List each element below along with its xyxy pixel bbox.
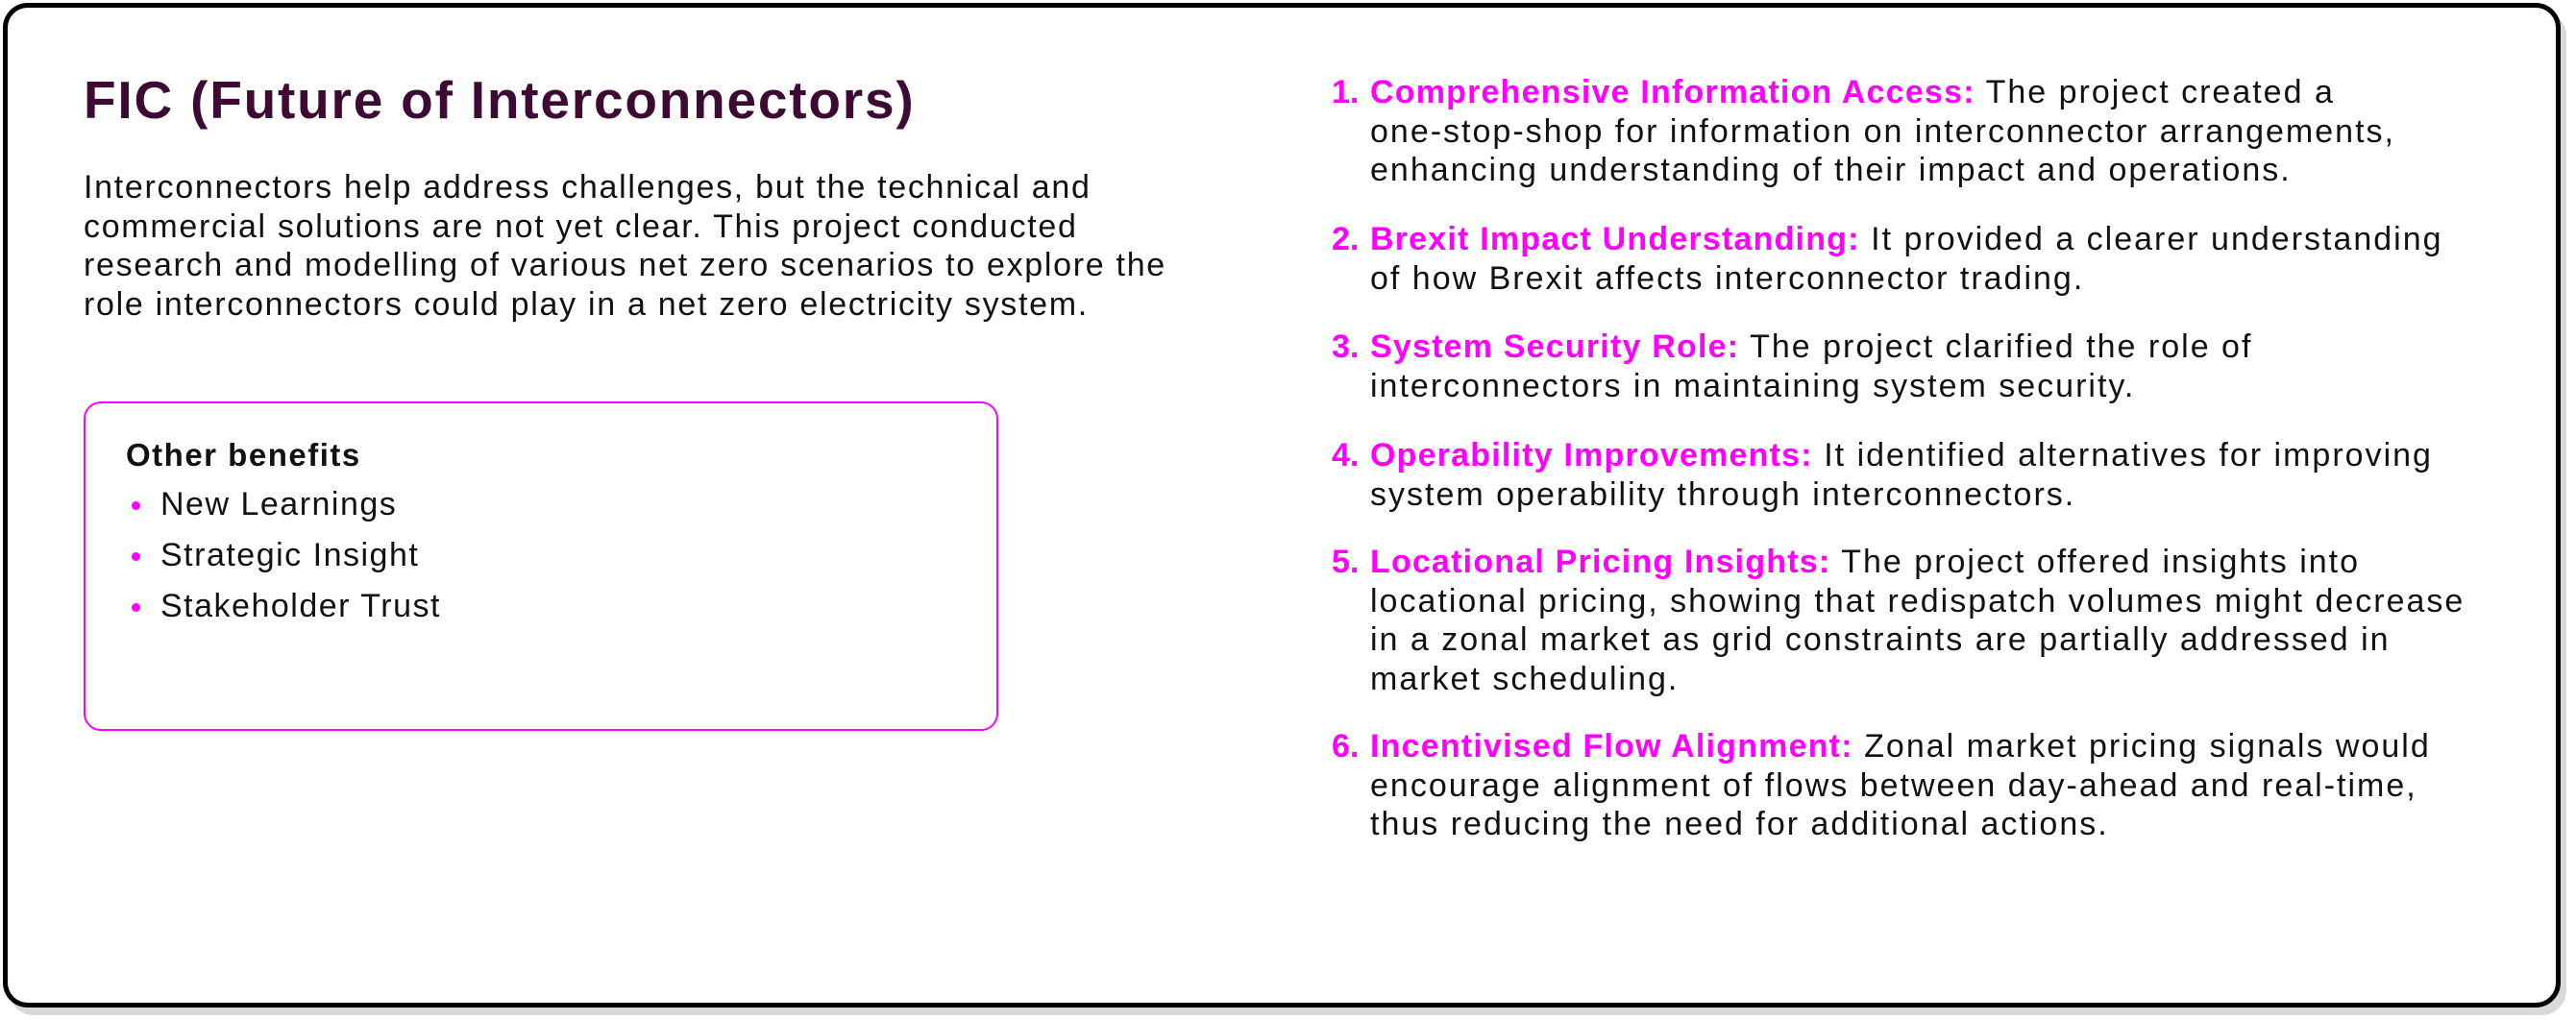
list item 2: of how Brexit affects interconnector trading.	[1370, 260, 2084, 297]
list item 1: 1.	[1332, 74, 1359, 110]
list item 6: 6.	[1332, 728, 1359, 765]
bullet: new learnings: New Learnings	[160, 486, 397, 522]
list item 5: in a zonal market as grid constraints are partially addressed in	[1370, 621, 2391, 658]
panel: other benefits	[84, 401, 998, 731]
list item 1	[1332, 74, 2395, 188]
list item 4: 4.	[1332, 437, 1359, 474]
list item 4: system operability through interconnectors.	[1370, 476, 2075, 513]
text block: intro: role interconnectors could play in a net zero electricity system.	[84, 286, 1089, 323]
list item 2	[1332, 221, 2443, 297]
list item 1: Comprehensive Information Access: The project created a	[1370, 74, 2335, 110]
list item 6: thus reducing the need for additional actions.	[1370, 806, 2109, 842]
heading: other benefits: Other benefits	[126, 437, 361, 473]
list item 3: 3.	[1332, 328, 1359, 365]
text block: intro: Interconnectors help address challenges, but the technical and	[84, 169, 1092, 206]
list item 5: market scheduling.	[1370, 661, 1679, 697]
list item 1: one-stop-shop for information on interconnector arrangements,	[1370, 113, 2395, 150]
text block: intro: research and modelling of various net zero scenarios to explore the	[84, 247, 1166, 283]
list item 6	[1332, 728, 2431, 842]
list item 3: System Security Role: The project clarified the role of	[1370, 328, 2252, 365]
list item 5: 5.	[1332, 544, 1359, 580]
list item 6: Incentivised Flow Alignment: Zonal market pricing signals would	[1370, 728, 2431, 765]
list item 5: locational pricing, showing that redispatch volumes might decrease	[1370, 583, 2465, 619]
bullet: strategic insight: Strategic Insight	[160, 537, 419, 573]
list item 4	[1332, 437, 2433, 513]
list item 1: enhancing understanding of their impact and operations.	[1370, 152, 2292, 188]
title: FIC (Future of Interconnectors)	[84, 70, 916, 130]
text block: intro: commercial solutions are not yet clear. This project conducted	[84, 207, 1078, 244]
text block: intro	[84, 169, 1166, 323]
list item 3: interconnectors in maintaining system security.	[1370, 368, 2135, 404]
bullet: stakeholder trust: Stakeholder Trust	[160, 588, 441, 624]
list item 6: encourage alignment of flows between day-ahead and real-time,	[1370, 767, 2417, 804]
list item 5	[1332, 544, 2465, 697]
list item 4: Operability Improvements: It identified alternatives for improving	[1370, 437, 2433, 474]
list item 2: 2.	[1332, 221, 1359, 257]
list item 3	[1332, 328, 2252, 404]
list item 5: Locational Pricing Insights: The project offered insights into	[1370, 544, 2360, 580]
list item 2: Brexit Impact Understanding: It provided a clearer understanding	[1370, 221, 2443, 257]
